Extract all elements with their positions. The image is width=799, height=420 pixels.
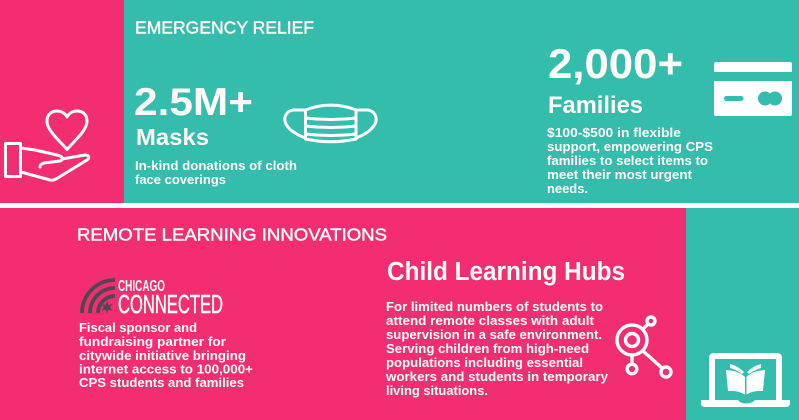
heading: emergency relief: EMERGENCY RELIEF [135, 18, 314, 38]
text: child learning hubs description: For limited numbers of students to [386, 299, 603, 314]
logo: chicago connected [82, 278, 223, 319]
text: masks description [135, 158, 297, 187]
label: masks: Masks [136, 124, 209, 150]
icon: laptop with book [701, 353, 790, 407]
logo wordmark: chicago: CHICAGO [118, 278, 165, 295]
text: child learning hubs description [385, 299, 609, 398]
stat: families count: 2,000+ [548, 40, 683, 87]
icon: hub network [617, 317, 671, 377]
label: families: Families [548, 92, 643, 119]
text: families description: $100-$500 in flexible [547, 125, 681, 140]
icon: star [101, 301, 113, 314]
heading: child learning hubs: Child Learning Hubs [387, 258, 625, 286]
text: child learning hubs description: attend remote classes with adult [386, 313, 595, 328]
text: chicago connected description: fundraising partner for [79, 334, 226, 349]
text: child learning hubs description: living situations. [386, 383, 488, 398]
text: chicago connected description: citywide initiative bringing [79, 348, 246, 363]
heading: remote learning innovations: REMOTE LEARNING INNOVATIONS [77, 224, 387, 244]
text: families description: needs. [547, 181, 588, 196]
text: chicago connected description: CPS students and families [79, 375, 244, 390]
icon: face mask [285, 105, 376, 142]
panel: emergency relief [0, 0, 799, 203]
logo wordmark: connected: CONNECTED [118, 291, 223, 319]
icon: payment card [714, 62, 792, 116]
text: child learning hubs description: populations including essential [386, 355, 583, 370]
panel: remote learning innovations [0, 208, 799, 420]
stat: masks count: 2.5M+ [134, 81, 253, 124]
text: chicago connected description: Fiscal sponsor and [79, 320, 197, 335]
text: child learning hubs description: supervision in a safe environment. [386, 327, 602, 342]
icon: hand holding heart [6, 111, 89, 180]
text: families description: families to select items to [547, 153, 708, 168]
text: child learning hubs description: workers and students in temporary [385, 369, 609, 384]
text: masks description: In-kind donations of cloth [135, 158, 297, 173]
text: families description [547, 125, 713, 196]
text: families description: meet their most urgent [547, 167, 693, 182]
text: masks description: face coverings [135, 172, 226, 187]
text: chicago connected description [79, 320, 253, 390]
text: families description: support, empowering CPS [547, 139, 713, 154]
text: chicago connected description: internet access to 100,000+ [79, 362, 253, 376]
text: child learning hubs description: Serving children from high-need [386, 341, 589, 356]
